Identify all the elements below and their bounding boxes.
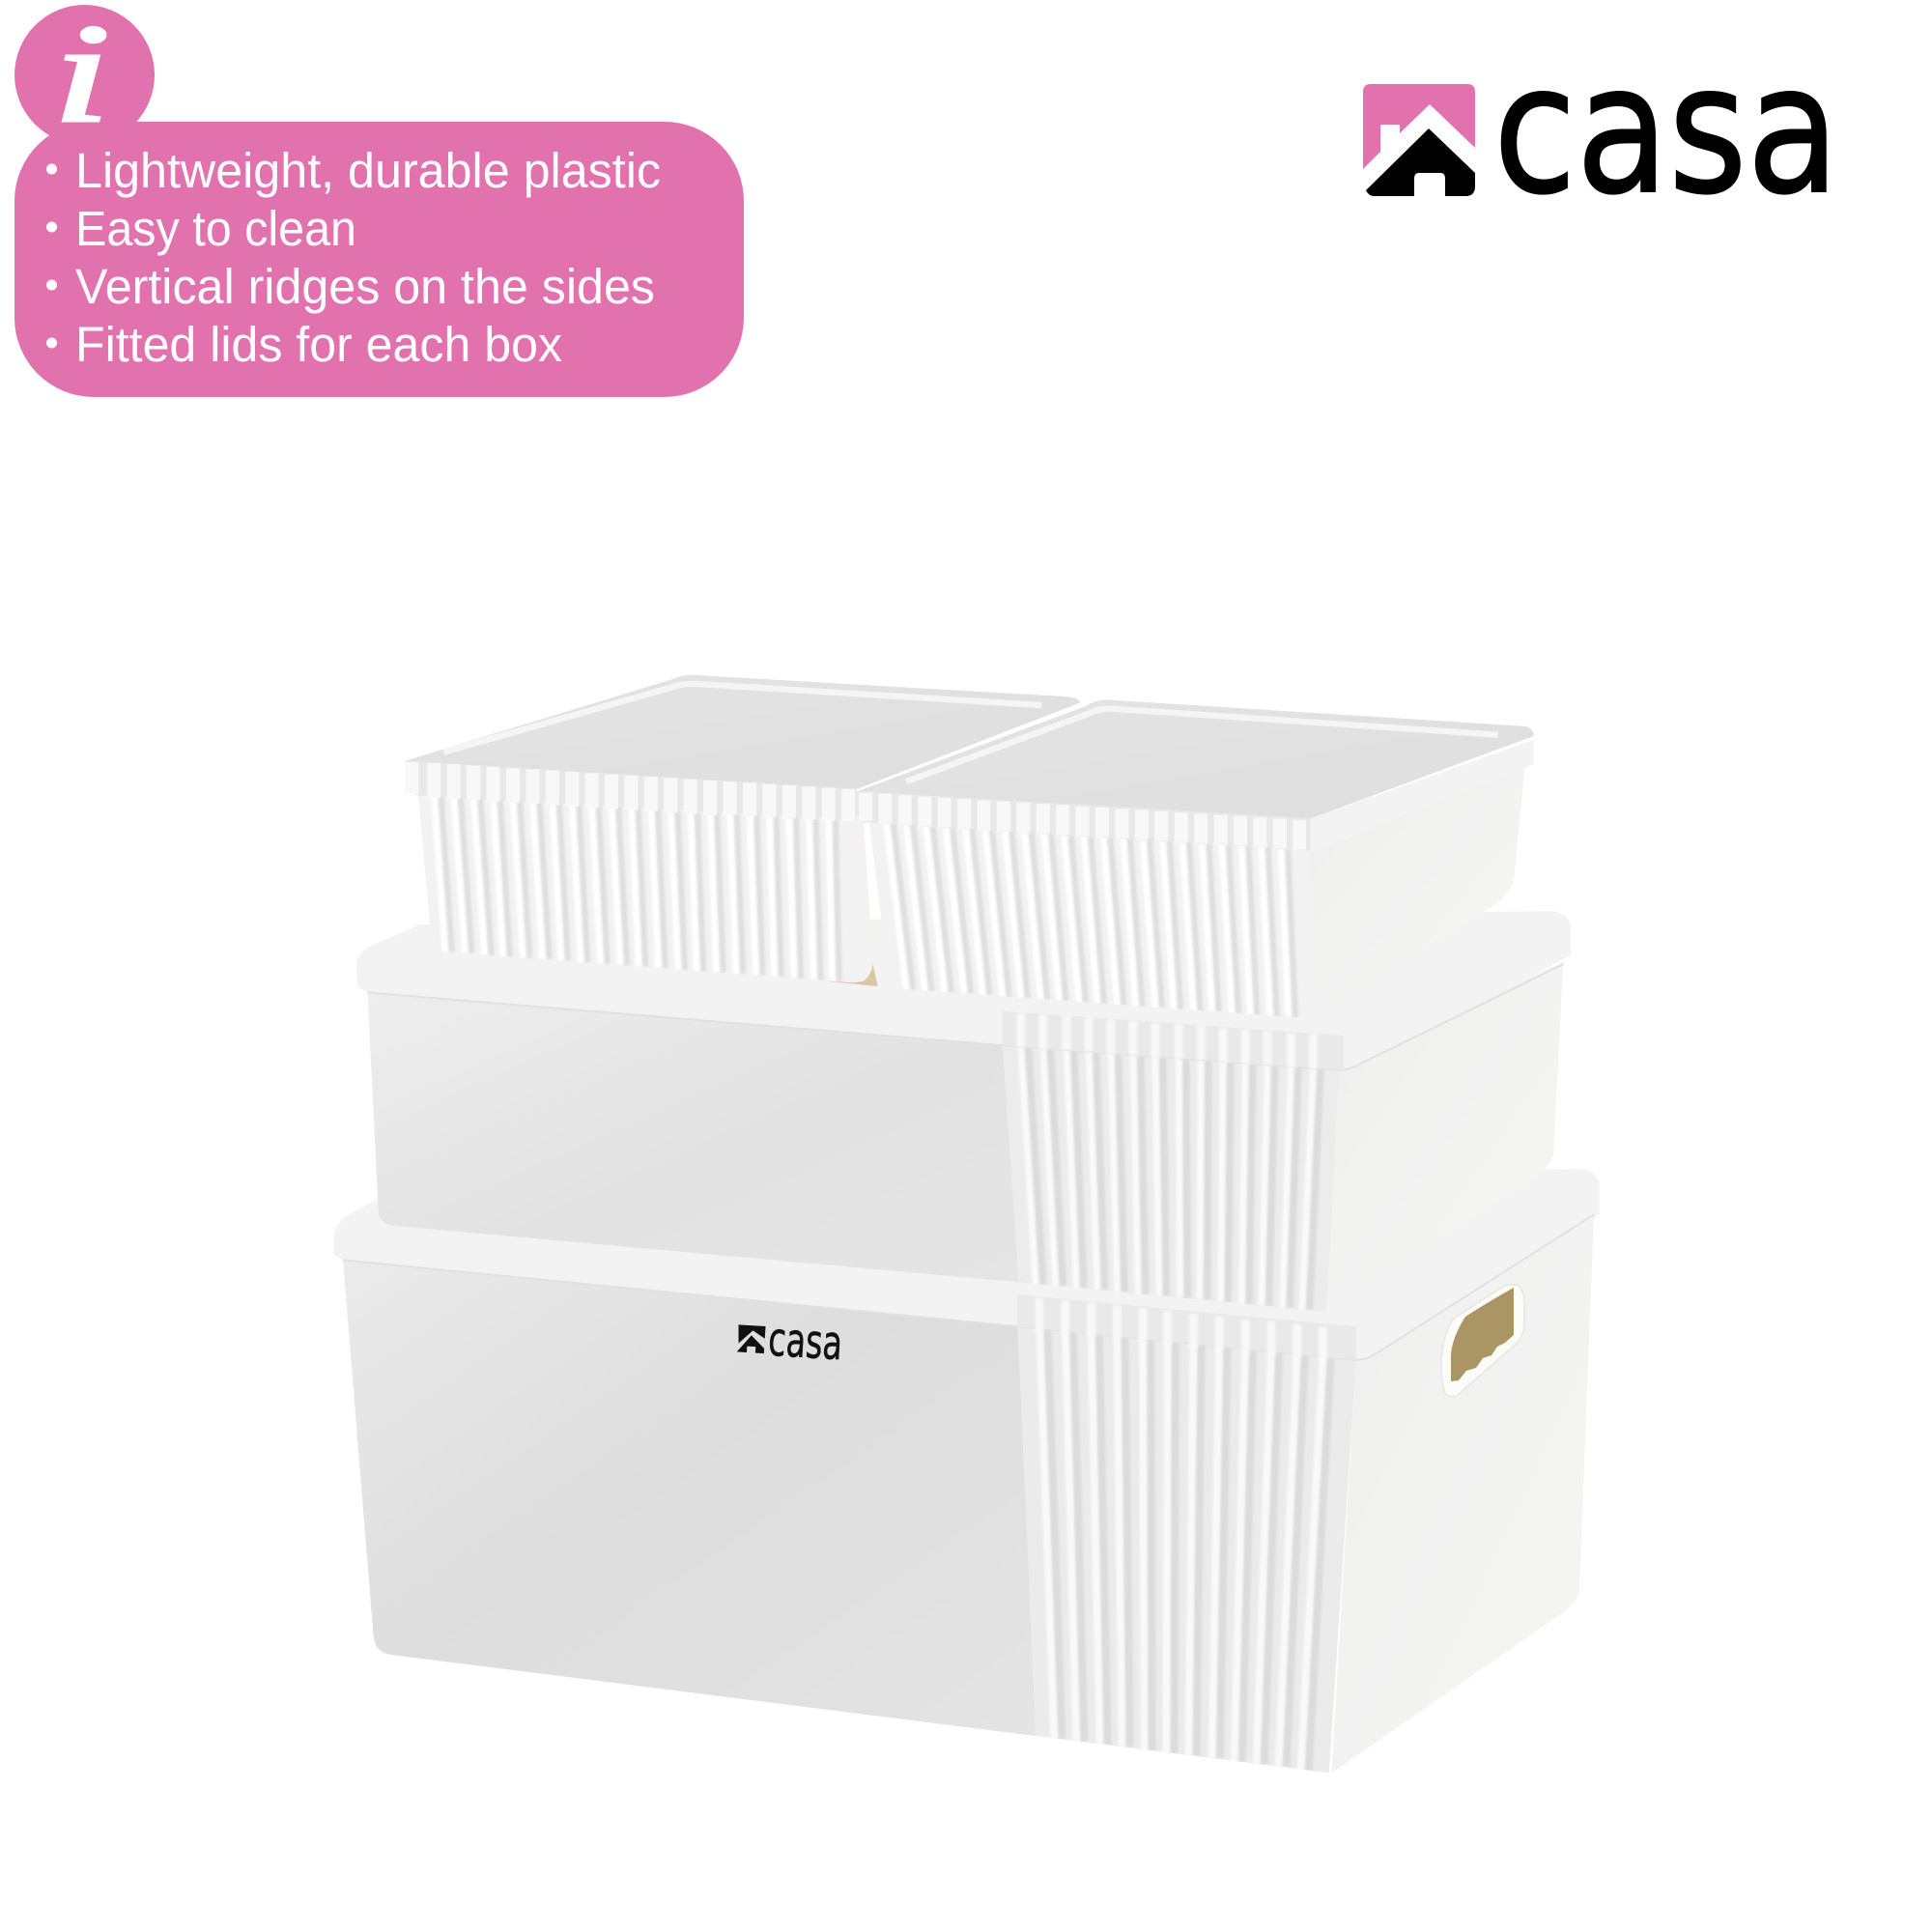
lid groove [443,684,1041,753]
large box lid ribs [1017,1294,1356,1360]
feature list: Fitted lids for each box [75,317,562,372]
right small box [857,699,1534,1018]
right small box ribbed front [869,822,1312,1018]
right small box side [1307,764,1525,1018]
left small box side [853,813,873,982]
logo icon: house [1363,84,1475,196]
lid groove [906,709,1498,781]
large box lid [334,1169,1599,1360]
product photo: stacked storage boxes [334,675,1599,1773]
large box front plain face [343,1258,1036,1736]
feature list: Lightweight, durable plastic [75,143,661,198]
right lid ribs [866,793,1299,849]
right small box lid [857,699,1534,851]
left lid ribs [412,762,848,821]
feature list: Vertical ridges on the sides [75,259,655,314]
large box handle cut-out [1441,1285,1524,1397]
info panel [14,0,744,397]
feature list: Easy to clean [75,201,356,256]
left small box ribbed front [418,794,868,982]
cream shadow gap [829,964,878,986]
medium box [356,911,1571,1312]
medium box ribbed face [1003,1043,1339,1312]
small logo wordmark: casa [767,1313,844,1371]
small casa logo on box [736,1311,844,1371]
medium box lid ribs [1003,1011,1344,1070]
brand logo [1363,27,1839,234]
medium box front plain face [367,990,1018,1282]
panel background [14,122,744,397]
medium box right side [1325,962,1563,1311]
large box [334,1169,1599,1773]
large box ribbed face [1017,1320,1356,1773]
left small box lid [406,675,1080,821]
icon: info circle [14,0,155,152]
small logo icon [737,1324,766,1353]
large box right side [1331,1208,1594,1773]
medium box lid [356,911,1571,1070]
feature list [46,143,661,372]
icon: info circle: i [52,0,111,152]
logo wordmark: casa [1493,27,1839,234]
left small box [406,675,1080,986]
